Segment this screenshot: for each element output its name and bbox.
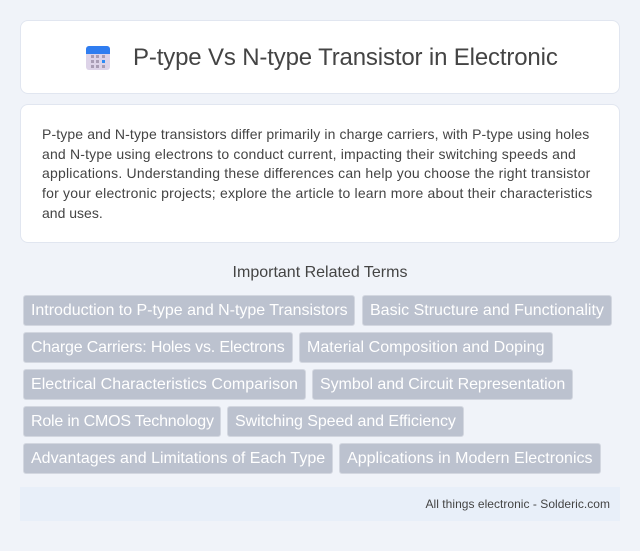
related term tags: Applications in Modern Electronics <box>347 450 593 467</box>
intro text: applications. Understanding these differences can help you choose the right transistor <box>42 165 590 181</box>
intro text: for your electronic projects; explore the article to learn more about their characteristics <box>42 185 592 201</box>
title: P-type Vs N-type Transistor in Electronic <box>133 44 558 71</box>
related term tags: Switching Speed and Efficiency <box>235 413 456 430</box>
related term tags: Advantages and Limitations of Each Type <box>31 450 325 467</box>
related term tags: Introduction to P-type and N-type Transistors <box>31 302 348 319</box>
related term tags <box>23 295 612 474</box>
footer text: All things electronic - Solderic.com <box>426 497 610 511</box>
related term tags: Electrical Characteristics Comparison <box>31 376 298 393</box>
section heading: Important Related Terms <box>233 264 407 281</box>
intro text <box>42 126 592 221</box>
header panel <box>20 20 620 94</box>
related term tags: Charge Carriers: Holes vs. Electrons <box>31 339 285 356</box>
related term tags: Basic Structure and Functionality <box>370 302 604 319</box>
related term tags: Role in CMOS Technology <box>31 413 214 430</box>
intro text: and N-type using electrons to conduct current, impacting their switching speeds and <box>42 146 576 162</box>
footer bar <box>20 487 620 521</box>
related term tags: Symbol and Circuit Representation <box>320 376 565 393</box>
intro panel <box>20 104 620 243</box>
related term tags: Material Composition and Doping <box>307 339 545 356</box>
intro text: and uses. <box>42 205 103 221</box>
icon: calendar <box>86 46 110 70</box>
intro text: P-type and N-type transistors differ primarily in charge carriers, with P-type using holes <box>42 126 589 142</box>
